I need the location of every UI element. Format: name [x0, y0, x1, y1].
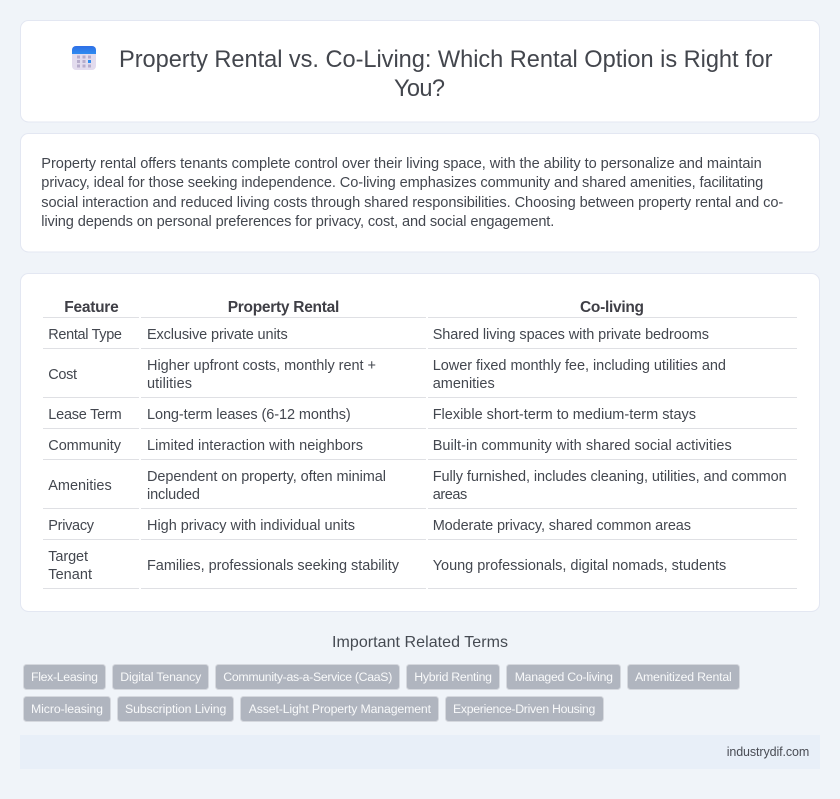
tag	[24, 696, 110, 722]
row: cost: Lower fixed monthly fee, including utilities and	[433, 358, 726, 374]
tag: Managed Co-living	[515, 670, 613, 684]
heading: related terms: Important Related Terms	[332, 634, 508, 651]
tag: Micro-leasing	[31, 702, 103, 716]
row: lease term: Flexible short-term to medium-term stays	[433, 407, 696, 423]
row: lease term: Long-term leases (6-12 months)	[147, 407, 351, 423]
row: target tenant	[48, 549, 726, 583]
row: cost: utilities	[147, 376, 192, 392]
tag	[112, 664, 208, 690]
tag: Amenitized Rental	[635, 670, 732, 684]
row: cost: Cost	[48, 367, 77, 383]
row: amenities: areas	[433, 487, 467, 503]
row: rental type: Exclusive private units	[147, 327, 288, 343]
panel: header	[20, 20, 820, 122]
row: target tenant: Families, professionals seeking stability	[147, 558, 400, 574]
row: rental type: Shared living spaces with private bedrooms	[433, 327, 709, 343]
row: amenities: Dependent on property, often minimal	[147, 469, 386, 485]
tag	[240, 696, 438, 722]
tag: Hybrid Renting	[414, 670, 492, 684]
tag	[406, 664, 500, 690]
tag	[118, 696, 234, 722]
row: target tenant: Tenant	[48, 567, 92, 583]
row: cost: Higher upfront costs, monthly rent +	[147, 358, 376, 374]
tag	[216, 664, 400, 690]
footer	[20, 735, 820, 769]
row: amenities: included	[147, 487, 200, 503]
tags: related terms	[24, 664, 740, 722]
row: target tenant: Young professionals, digital nomads, students	[433, 558, 726, 574]
row: privacy	[48, 518, 691, 534]
icon: calendar	[72, 46, 96, 70]
row: lease term: Lease Term	[48, 407, 122, 423]
row: amenities: Amenities	[48, 478, 112, 494]
row: privacy: Privacy	[48, 518, 95, 534]
tag: Experience-Driven Housing	[453, 702, 595, 716]
title: You?	[394, 76, 445, 102]
tag: Community-as-a-Service (CaaS)	[223, 670, 392, 684]
row: amenities	[48, 469, 787, 503]
row: community	[48, 438, 732, 454]
row: rental type	[48, 327, 709, 343]
intro text: social interaction and reduced living costs through shared responsibilities. Choosing between property rental and co-	[41, 195, 783, 211]
table header	[64, 299, 644, 316]
row: cost: amenities	[433, 376, 495, 392]
table header: Feature	[64, 299, 119, 316]
title	[119, 47, 773, 102]
row: amenities: Fully furnished, includes cleaning, utilities, and common	[433, 469, 787, 485]
tag: Asset-Light Property Management	[249, 702, 432, 716]
intro text: privacy, ideal for those seeking independence. Co-living emphasizes community and shared amenities, facilitating	[41, 175, 763, 191]
table header: Property Rental	[228, 299, 339, 316]
tag	[628, 664, 740, 690]
tag: Subscription Living	[125, 702, 226, 716]
row: privacy: Moderate privacy, shared common areas	[433, 518, 691, 534]
tag: Flex-Leasing	[31, 670, 98, 684]
intro text: living depends on personal preferences for privacy, cost, and social engagement.	[41, 214, 554, 230]
row: community: Community	[48, 438, 122, 454]
row: lease term	[48, 407, 696, 423]
tag: Digital Tenancy	[120, 670, 202, 684]
tag	[24, 664, 106, 690]
title: Property Rental vs. Co-Living: Which Rental Option is Right for	[119, 47, 773, 73]
tag	[446, 696, 604, 722]
row: rental type: Rental Type	[48, 327, 122, 343]
intro text	[41, 156, 783, 230]
table header: Co-living	[580, 299, 644, 316]
tag	[506, 664, 620, 690]
panel: comparison table	[20, 274, 820, 612]
row: community: Limited interaction with neighbors	[147, 438, 363, 454]
intro text: Property rental offers tenants complete control over their living space, with the ability to personalize and maintain	[41, 156, 762, 172]
row: target tenant: Target	[48, 549, 88, 565]
panel: introduction	[20, 134, 820, 252]
footer: industrydif.com	[727, 745, 809, 759]
row: privacy: High privacy with individual units	[147, 518, 355, 534]
row: cost	[48, 358, 726, 392]
row: community: Built-in community with shared social activities	[433, 438, 732, 454]
